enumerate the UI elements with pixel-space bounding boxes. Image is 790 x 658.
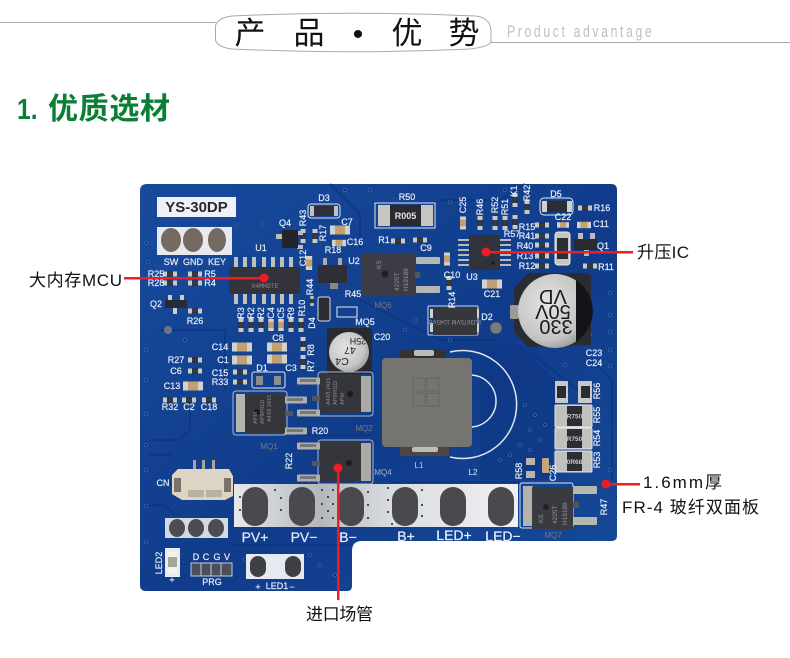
electrolytic capacitor c4: 25H [350,336,366,346]
silkscreen labels: R42 [522,185,532,201]
silkscreen labels: C23 [586,348,602,358]
current sense resistors: R750 [567,414,583,420]
silkscreen labels: U1 [255,243,267,253]
silkscreen labels: C7 [341,217,353,227]
silkscreen labels: R7 [306,360,316,372]
silkscreen labels: LED+ [436,527,472,543]
silkscreen labels: C21 [484,289,500,299]
silkscreen labels: R2 [256,307,266,319]
shunt resistor r005 [375,203,435,228]
silkscreen labels: R52 [490,197,500,213]
mosfet mq7: 4225T [552,506,559,524]
silkscreen labels: PV− [291,529,317,545]
silkscreen labels: R32 [162,402,178,412]
ic u1 mcu: 04MHDTE [251,283,279,290]
terminal pad strip [234,484,518,527]
silkscreen labels: D3 [318,193,330,203]
dim component labels: L2 [469,468,478,477]
silkscreen labels: R15 [519,222,535,232]
heading: product advantage: 势 [448,16,480,51]
silkscreen labels: R18 [325,245,341,255]
silkscreen labels: R14 [447,292,457,308]
electrolytic capacitor c4: C4 [335,355,349,367]
silkscreen labels: C3 [285,363,297,373]
silkscreen labels [148,185,614,592]
power inductor l1 [382,350,472,456]
silkscreen labels: R4 [204,278,216,288]
heading: product advantage: 优 [392,16,422,51]
callout: boost ic [482,243,689,262]
silkscreen labels: SW [164,257,179,267]
mosfet mq6 [362,254,440,296]
silkscreen labels: C [203,552,210,562]
silkscreen labels: − [289,582,295,592]
silkscreen labels: G [213,552,221,562]
silkscreen labels: D2 [481,312,493,322]
mosfet mq1: A4X8 2415 [267,395,273,422]
silkscreen labels: C8 [272,333,284,343]
mosfet mq2: APM [340,393,346,405]
mosfet mq1 [233,391,307,435]
dim component labels [260,301,562,540]
silkscreen labels: + [255,582,261,592]
pcb board [140,184,617,592]
boost ic u3 [458,235,511,270]
header band [0,13,790,52]
silkscreen labels: C20 [374,332,390,342]
mosfet mq6: H19189 [403,268,410,291]
silkscreen labels: R28 [148,278,164,288]
silkscreen labels: C22 [555,212,571,222]
transistor q4 [276,230,303,249]
silkscreen labels: D4 [307,317,317,329]
callout: mcu: 大内存MCU [29,271,122,290]
silkscreen labels: MQ5 [355,317,375,327]
mosfet mq7: H19189 [562,502,569,525]
silkscreen labels: B+ [397,528,415,544]
silkscreen labels: B− [339,529,357,545]
silkscreen labels: PV+ [242,529,268,545]
mosfet mq2: AP9P01D [333,381,339,405]
silkscreen labels: C5 [276,307,286,319]
mosfet mq2 [297,372,373,416]
silkscreen labels: R5 [204,269,216,279]
silkscreen labels: C16 [347,237,363,247]
callout: mcu [29,271,268,290]
callout: imported mosfet [306,464,373,624]
silkscreen labels: C2 [183,402,195,412]
inductor outline rings [450,351,517,458]
silkscreen labels: R51 [500,199,510,215]
silkscreen labels: R47 [599,499,609,515]
silkscreen labels: R43 [298,210,308,226]
current sense resistors: R750 [567,436,583,443]
mosfet mq2: A4X8 2415 [326,378,332,405]
callout: boost ic: 升压IC [637,243,689,262]
current sense resistors: 0R68 [567,459,583,466]
silkscreen labels: LED1 [266,581,288,591]
small passives upper right [391,193,597,290]
silkscreen labels: LED2 [154,552,164,574]
prg header [191,563,232,576]
electrolytic capacitor c4: 47 [344,344,356,356]
silkscreen labels: C18 [201,402,217,412]
silkscreen labels: R56 [592,383,602,399]
mounting hole [164,326,172,334]
callout: pcb thickness [602,473,759,517]
r45 outline [337,307,357,317]
silkscreen labels: C26 [548,465,558,481]
silkscreen labels: R16 [594,203,610,213]
mosfet mq1: APM [253,412,259,424]
silkscreen labels: D1 [256,363,268,373]
diode d2 [428,306,481,335]
silkscreen labels: R10 [297,300,307,316]
electrolytic capacitor 330 [510,273,593,348]
diode d2: PJ3875VM 1045V8 [428,318,481,324]
silkscreen labels: R40 [517,241,533,251]
silkscreen labels: Q2 [150,299,162,309]
silkscreen labels: C13 [164,381,180,391]
silkscreen labels: D [193,552,200,562]
silkscreen labels: C14 [212,342,228,352]
silkscreen labels: C4 [266,307,276,319]
silkscreen labels: C6 [170,366,182,376]
mosfet mq6: 4225T [394,273,401,291]
dark inductor ground plane [480,345,560,480]
silkscreen labels: C10 [444,270,460,280]
transistor q2 [165,295,187,314]
board name label: YS-30DP [165,199,228,216]
silkscreen labels: Q1 [597,241,609,251]
silkscreen labels: R45 [345,289,361,299]
silkscreen labels: + [169,575,175,585]
electrolytic capacitor 330: 50V [535,300,571,322]
ic u2 [318,258,347,289]
mosfet mq1: AP9P01D [260,400,266,424]
mounting hole [490,322,502,334]
heading: product advantage [234,16,480,51]
silkscreen labels: R3 [236,307,246,319]
diode d3 [308,204,340,218]
electrolytic capacitor 330: VD [539,285,567,307]
silkscreen labels: R26 [187,316,203,326]
english subheading: Product advantage [507,23,652,42]
silkscreen labels: GND [183,257,204,267]
mosfet mq4 [297,440,373,484]
silkscreen labels: R17 [318,225,328,241]
heading: product advantage: 品 [294,16,324,51]
silkscreen labels: R44 [305,279,315,295]
callout: imported mosfet: 进口场管 [306,605,373,624]
silkscreen labels: D5 [550,189,562,199]
callout: pcb thickness: FR-4 玻纤双面板 [622,498,759,517]
section title: 优质选材 [48,93,170,126]
board name label [157,197,236,217]
silkscreen labels: R54 [592,430,602,446]
transistor q1 [574,233,597,256]
dim component labels: MQ1 [260,442,278,451]
callout: pcb thickness: 1.6mm厚 [643,473,722,492]
silkscreen labels: LED− [485,528,521,544]
vias [144,188,612,576]
shunt resistor r005: R005 [395,211,416,221]
heading: product advantage: 产 [234,16,266,51]
dim component labels: MQ4 [374,468,392,477]
dim component labels: MQ2 [355,424,373,433]
small passives left [163,226,350,402]
silkscreen labels: KEY [208,257,226,267]
silkscreen labels: C15 [212,368,228,378]
silkscreen labels: R41 [519,231,535,241]
silkscreen labels: C1 [217,355,229,365]
silkscreen labels: U3 [466,272,478,282]
diode d5 [540,198,573,215]
silkscreen labels: R33 [212,377,228,387]
led2 [165,548,180,577]
sw gnd key pads [157,227,232,255]
silkscreen labels: R1 [378,235,390,245]
board outline [140,184,617,591]
silkscreen labels: R22 [284,453,294,469]
silkscreen labels: PRG [202,577,222,587]
dim component labels: MQ7 [544,531,562,540]
silkscreen labels: U2 [348,256,360,266]
silkscreen labels: C24 [586,358,602,368]
electrolytic capacitor c4 [327,328,372,374]
three pad header [165,518,228,538]
silkscreen labels: R58 [514,463,524,479]
silkscreen labels: R53 [592,452,602,468]
silkscreen labels: R50 [399,192,415,202]
silkscreen labels: R57 [504,229,520,239]
silkscreen labels: Q4 [279,218,291,228]
silkscreen labels: R11 [598,262,614,272]
mosfet mq7 [520,483,597,529]
diode d6 [555,232,570,265]
dim component labels: MQ6 [374,301,392,310]
diode d1 [252,372,285,388]
silkscreen labels: C11 [593,219,609,229]
current sense resistors [555,381,592,472]
ic u1 mcu [229,257,300,304]
heading: product advantage: • [353,18,363,51]
diode d4 [318,297,330,321]
silkscreen labels: R8 [306,344,316,356]
silkscreen labels: R12 [519,261,535,271]
silkscreen labels: V [224,552,230,562]
silkscreen labels: C25 [458,197,468,213]
silkscreen labels: R9 [286,307,296,319]
mosfet mq7: KS [538,514,545,523]
silkscreen labels: R2 [246,307,256,319]
section title: 1. [17,93,38,125]
dim component labels: L1 [415,461,424,470]
silkscreen labels: R27 [168,355,184,365]
copper traces [150,184,612,545]
silkscreen labels: C12 [298,250,308,266]
silkscreen labels: R13 [517,251,533,261]
mosfet mq6: KS [376,260,383,269]
silkscreen labels: R20 [312,426,328,436]
heading bubble [216,13,491,52]
silkscreen labels: C9 [420,243,432,253]
silkscreen labels: R25 [148,269,164,279]
connector cn [172,460,233,500]
led1 pads [246,554,304,579]
silkscreen labels: R55 [592,407,602,423]
silkscreen labels: R46 [475,199,485,215]
silkscreen labels: K1 [509,185,519,197]
small parts near mq7 [526,458,549,478]
silkscreen labels: CN [156,478,170,488]
electrolytic capacitor 330: 330 [539,315,573,337]
